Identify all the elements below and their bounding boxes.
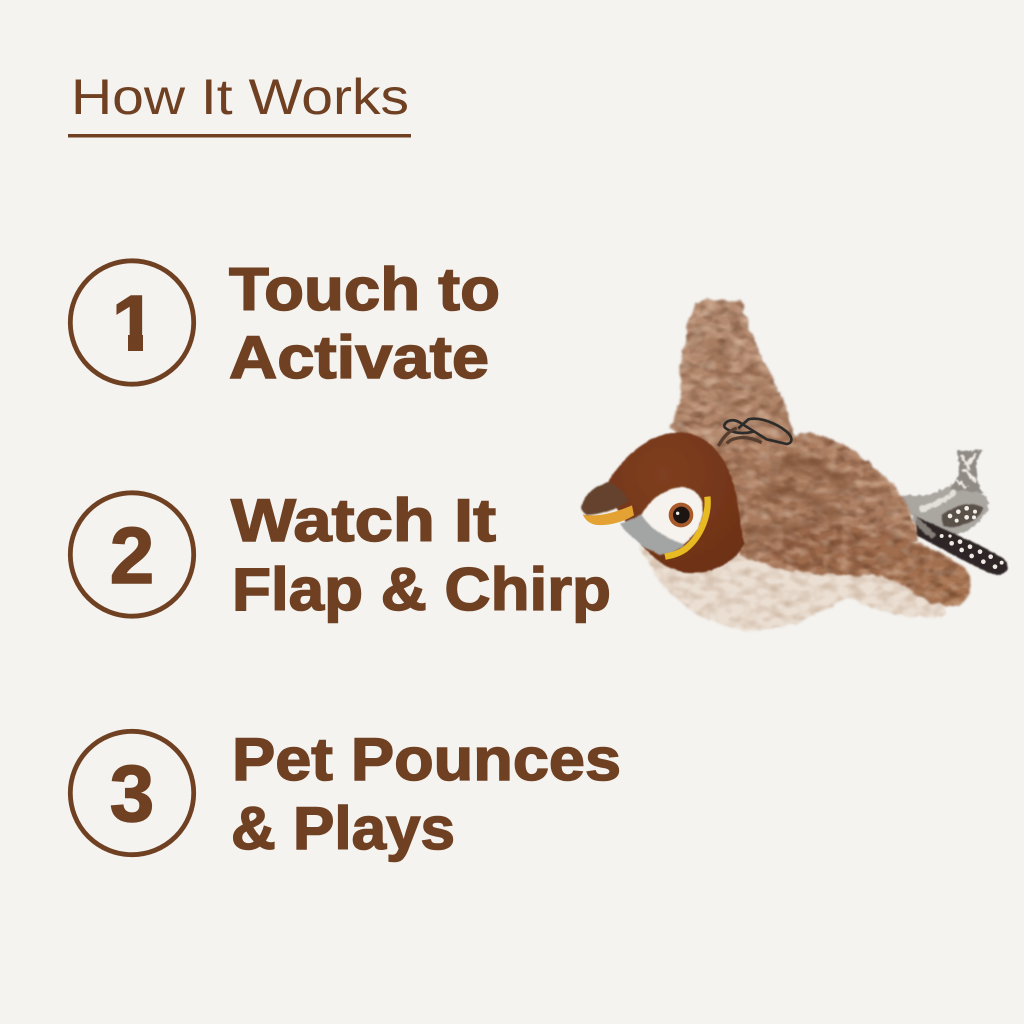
white face patch <box>642 487 703 544</box>
lower wing <box>767 526 971 607</box>
upper wing <box>669 299 794 453</box>
step 2 label: Watch It <box>231 487 496 554</box>
number badge 1: 1 <box>112 279 156 368</box>
number badge 2 <box>70 493 194 616</box>
grey throat <box>620 513 685 555</box>
heading text: How It Works <box>71 69 409 125</box>
number badge 1 <box>70 261 194 384</box>
number badge 3: 3 <box>110 749 154 838</box>
step 1 <box>70 256 500 391</box>
tail feathers <box>900 451 1008 575</box>
belly <box>640 543 945 631</box>
heading underline <box>68 134 411 138</box>
step 3 label: Pet Pounces <box>232 726 621 793</box>
step 2 <box>70 487 611 623</box>
body <box>710 433 918 575</box>
step 3 label: & Plays <box>231 795 455 862</box>
yellow collar <box>665 497 708 557</box>
step 2 label: Flap & Chirp <box>232 556 611 623</box>
metal clip <box>718 419 791 446</box>
step 1 label: Touch to <box>229 256 500 323</box>
plush bird toy <box>581 299 1008 631</box>
number badge 3 <box>70 731 194 855</box>
infographic canvas <box>68 78 1009 862</box>
step 1 label: Activate <box>229 324 489 391</box>
heading: How It Works <box>68 69 411 138</box>
number badge 2: 2 <box>110 511 154 600</box>
step 3 <box>70 726 621 862</box>
head <box>605 432 744 573</box>
beak <box>581 483 634 525</box>
eye <box>669 503 693 527</box>
